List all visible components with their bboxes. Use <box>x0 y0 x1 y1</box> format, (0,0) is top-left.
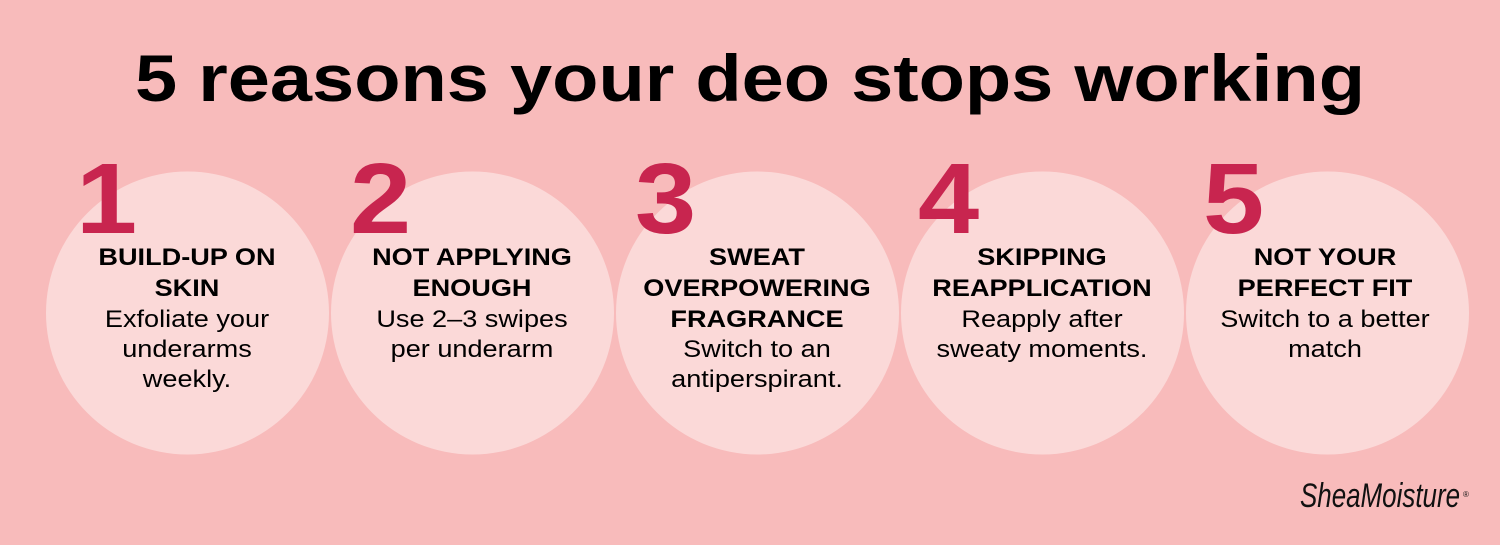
panel: reason 1: Exfoliate your <box>105 306 270 333</box>
panel: reason 5: match <box>1288 336 1362 363</box>
panel: reason 3: Switch to an <box>683 336 831 363</box>
panel: reason 2 <box>331 144 614 454</box>
panel: reason 3: 3 <box>635 144 696 255</box>
panel: reason 4: sweaty moments. <box>937 336 1147 363</box>
panel: reason 2: per underarm <box>391 336 553 363</box>
panel: reason 1: weekly. <box>142 366 231 393</box>
panel: reason 5: NOT YOUR <box>1254 244 1396 271</box>
panel: reason 5 <box>1186 144 1469 454</box>
panel: reason 5: PERFECT FIT <box>1238 275 1413 302</box>
panel: reason 2: 2 <box>350 144 411 255</box>
panel: reason 4: REAPPLICATION <box>932 275 1152 302</box>
panel: reason 4: SKIPPING <box>977 244 1107 271</box>
panel: reason 1: 1 <box>76 144 137 255</box>
panel: reason 5: 5 <box>1203 144 1264 255</box>
panel: reason 1: BUILD-UP ON <box>98 244 276 271</box>
panel: reason 1: underarms <box>122 336 252 363</box>
panel: reason 2: ENOUGH <box>413 275 531 302</box>
panel: reason 3 <box>616 144 899 454</box>
panel: reason 5: Switch to a better <box>1220 306 1430 333</box>
panel: reason 1: SKIN <box>155 275 219 302</box>
logo: SheaMoisture: ® <box>1463 490 1469 499</box>
panel: reason 3: OVERPOWERING <box>643 275 871 302</box>
panel: reason 2: Use 2–3 swipes <box>376 306 568 333</box>
panel: reason 2: NOT APPLYING <box>372 244 572 271</box>
panel: reason 1 <box>46 144 329 454</box>
panel: reason 3: FRAGRANCE <box>670 306 844 333</box>
panel: reason 3: antiperspirant. <box>671 366 843 393</box>
panel: reason 4: Reapply after <box>961 306 1123 333</box>
panel: reason 3: SWEAT <box>709 244 805 271</box>
title: 5 reasons your deo stops working <box>135 41 1365 115</box>
panel: reason 4 <box>901 144 1184 454</box>
panel: reason 4: 4 <box>918 144 979 255</box>
